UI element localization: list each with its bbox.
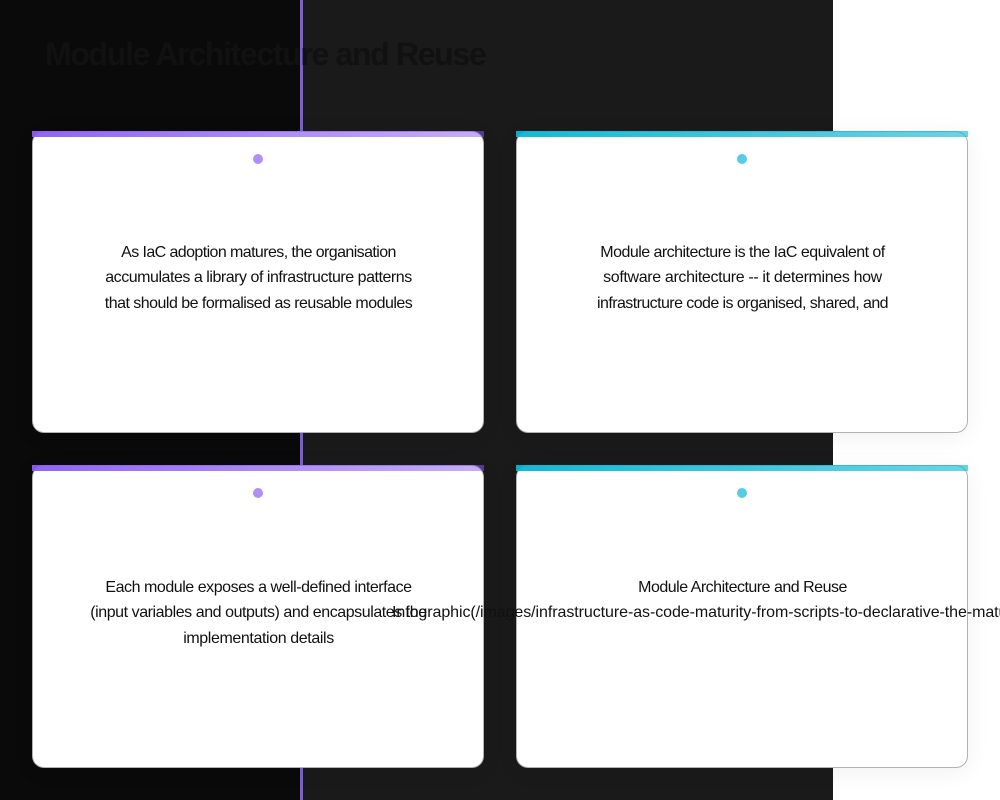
card 2 text bbox=[597, 244, 888, 312]
card 3 top bar bbox=[32, 465, 484, 471]
card 2 dot bbox=[737, 154, 747, 164]
vertical accent line bbox=[300, 0, 303, 800]
card 1 dot bbox=[253, 154, 263, 164]
card 2 text: infrastructure code is organised, shared, and bbox=[597, 295, 888, 312]
card 3 text: implementation details bbox=[183, 630, 334, 647]
card 1 text: accumulates a library of infrastructure patterns bbox=[105, 269, 412, 286]
card 3 text bbox=[90, 579, 427, 647]
title: Module Architecture and Reuse bbox=[45, 36, 485, 72]
card 1 top bar bbox=[32, 131, 484, 137]
panel: card 1 bbox=[32, 131, 484, 433]
card 4 top bar bbox=[516, 465, 968, 471]
panel: card 2 bbox=[516, 131, 968, 434]
panel: card 4 bbox=[392, 465, 1000, 769]
card 2 top bar bbox=[516, 131, 968, 137]
card 3 text: (input variables and outputs) and encapsulates the bbox=[90, 604, 427, 621]
card 1 text: that should be formalised as reusable modules bbox=[105, 295, 412, 312]
card 4 text bbox=[392, 579, 1000, 621]
card 3 text: Each module exposes a well-defined interface bbox=[105, 579, 412, 596]
card 3 dot bbox=[253, 488, 263, 498]
card 2 text: software architecture -- it determines how bbox=[603, 269, 882, 286]
background: left dark column bbox=[0, 0, 300, 800]
card 4 dot bbox=[737, 488, 747, 498]
card 2 text: Module architecture is the IaC equivalent of bbox=[600, 244, 885, 261]
panel: card 3 bbox=[32, 465, 484, 768]
card 4 text: Module Architecture and Reuse bbox=[638, 579, 847, 596]
background: right dark column bbox=[303, 0, 833, 800]
card 1 text: As IaC adoption matures, the organisation bbox=[121, 244, 396, 261]
card 1 text bbox=[105, 244, 412, 312]
